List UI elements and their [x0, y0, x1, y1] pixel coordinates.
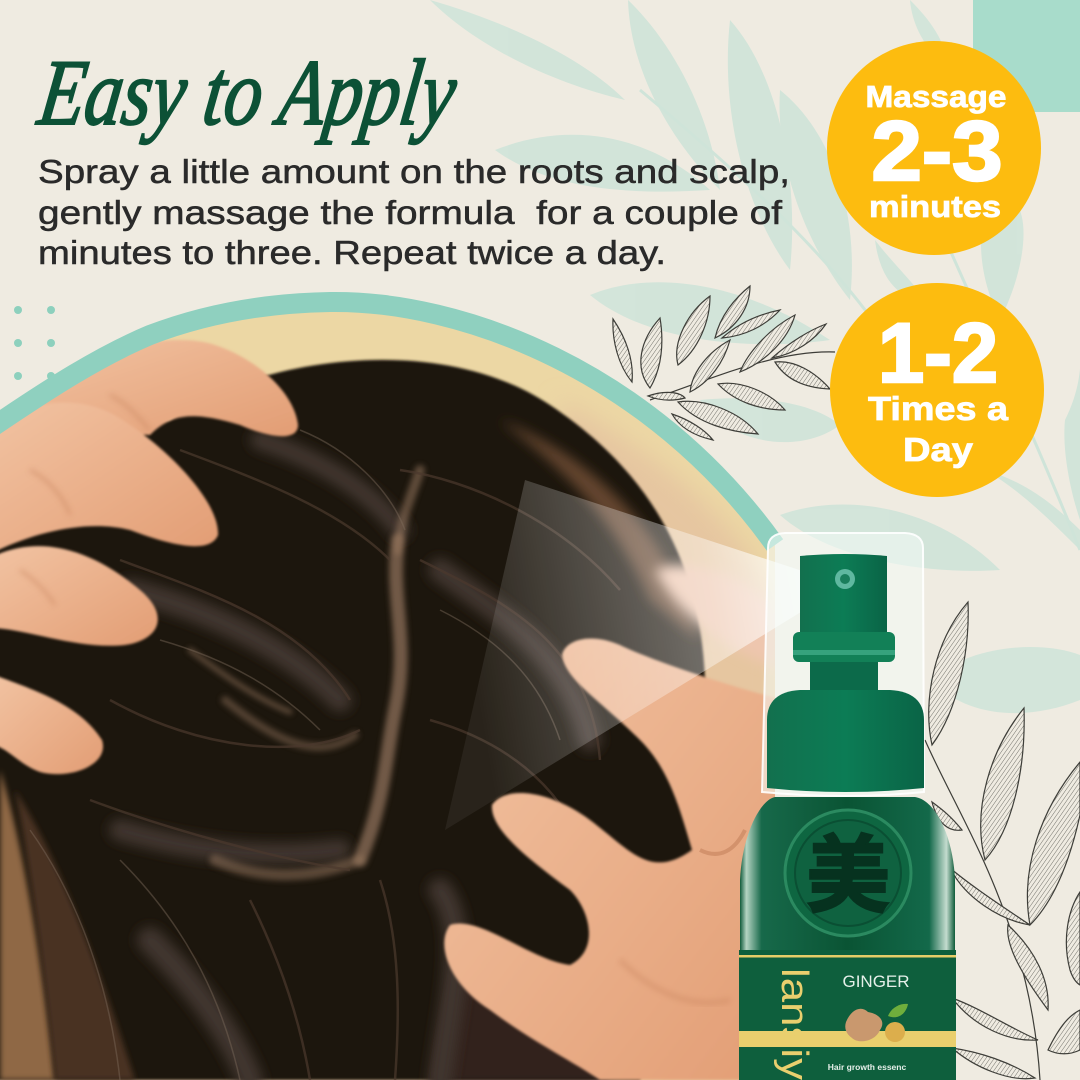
badge: 1-2 times a day: Day	[903, 431, 974, 468]
spray cone	[445, 480, 845, 830]
scalp partings	[190, 470, 420, 875]
nozzle	[800, 554, 887, 640]
green label	[739, 950, 956, 1080]
warm backdrop	[568, 412, 764, 694]
finger 2	[0, 402, 218, 552]
hair strands	[90, 450, 620, 1080]
clear cap	[762, 533, 924, 796]
badge: 1-2 times a day	[830, 283, 1044, 497]
emblem: 美	[806, 809, 890, 930]
title: Easy to Apply	[31, 41, 463, 145]
left hand	[0, 340, 298, 774]
badge: 1-2 times a day: Times a	[868, 390, 1009, 427]
hair mass	[0, 360, 710, 1080]
photo: head and hands	[0, 300, 785, 1080]
product bottle	[739, 533, 956, 1080]
shoulder	[767, 690, 924, 792]
essence text: Hair growth essenc	[828, 1062, 906, 1072]
badge: 1-2 times a day: 1-2	[878, 306, 998, 400]
corner square	[973, 0, 1080, 112]
leaf stems	[640, 90, 1080, 550]
badge: massage 2-3 minutes: minutes	[869, 189, 1001, 224]
decorative dots	[14, 306, 55, 380]
blurred back finger	[650, 556, 765, 661]
ginger icon	[845, 1004, 908, 1042]
badge: massage 2-3 minutes: 2-3	[872, 104, 1002, 198]
finger 1 top	[20, 340, 298, 436]
finger 4	[0, 675, 103, 774]
finger 3	[0, 546, 158, 646]
background leaves	[430, 0, 1080, 713]
description text: Spray a little amount on the roots and scalp,	[38, 153, 790, 190]
badge: massage 2-3 minutes: Massage	[866, 79, 1006, 114]
description text: gently massage the formula for a couple of	[38, 194, 783, 231]
brand text: lansiy	[773, 968, 815, 1080]
teal arc frame	[0, 302, 775, 545]
right hand	[444, 638, 785, 1080]
badge: massage 2-3 minutes	[827, 41, 1041, 255]
bottle body	[740, 797, 955, 1080]
collar	[793, 632, 895, 662]
description text	[38, 153, 790, 271]
emblem	[785, 809, 911, 936]
hair sheen clumps	[120, 440, 590, 1080]
line-art leaf sprig lower right	[925, 602, 1080, 1080]
description text: minutes to three. Repeat twice a day.	[38, 234, 666, 271]
line-art leaf sprig upper	[613, 286, 835, 440]
ginger label: GINGER	[842, 972, 910, 991]
